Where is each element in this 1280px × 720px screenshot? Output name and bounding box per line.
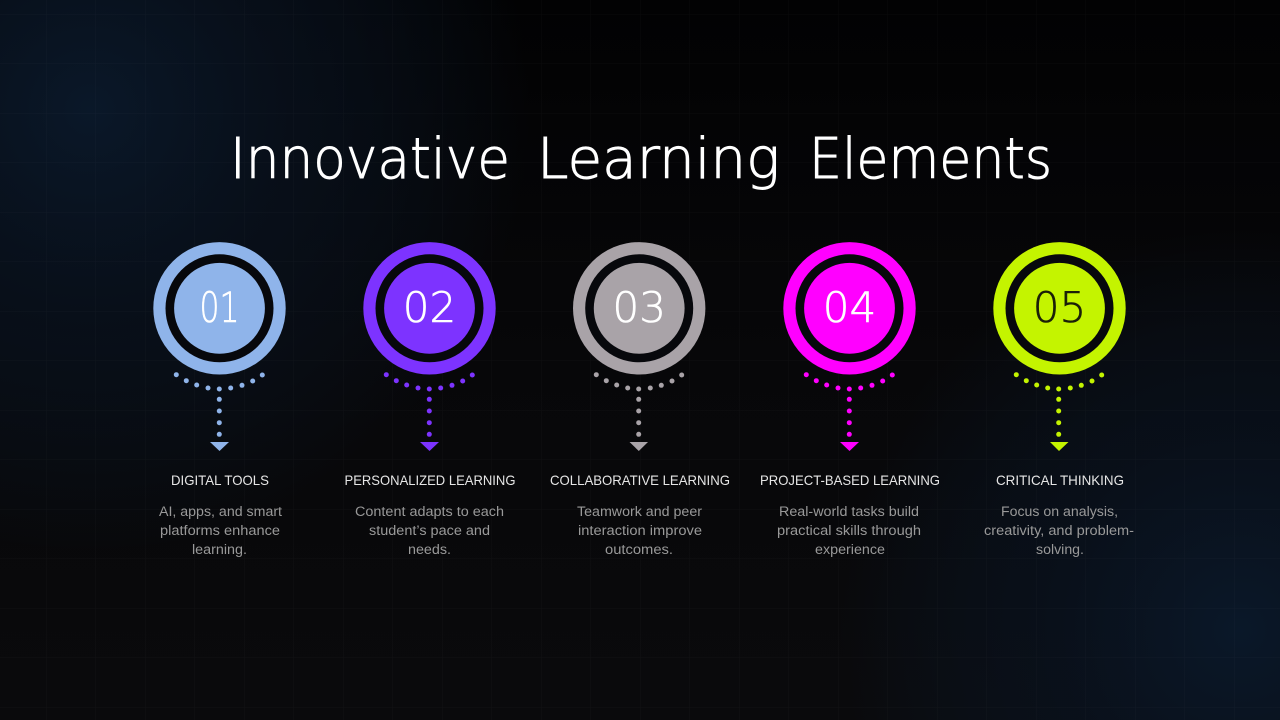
- description 02: student’s pace and: [369, 523, 490, 538]
- step 04: project-based learning: [760, 242, 940, 557]
- description 02: Content adapts to each: [355, 504, 504, 519]
- description 05: creativity, and problem-: [984, 523, 1134, 538]
- dotted connector with arrow 02: [384, 372, 475, 451]
- description 03: interaction improve: [578, 523, 702, 538]
- dotted connector with arrow 03: [594, 372, 684, 451]
- dotted connector with arrow 05: [1014, 372, 1104, 451]
- badge 01: 01: [200, 283, 240, 332]
- heading 02: PERSONALIZED LEARNING: [344, 472, 516, 488]
- dotted connector with arrow 01: [174, 372, 265, 451]
- badge 02: [363, 242, 496, 374]
- dotted connector with arrow 04: [804, 372, 895, 451]
- description 04: [777, 504, 921, 557]
- description 05: [984, 504, 1134, 557]
- badge 05: [993, 242, 1126, 374]
- description 04: experience: [815, 542, 885, 557]
- heading 03: COLLABORATIVE LEARNING: [550, 472, 730, 488]
- badge 01: [153, 242, 286, 374]
- description 01: AI, apps, and smart: [159, 504, 282, 519]
- badge 04: 04: [823, 283, 876, 332]
- step 03: collaborative learning: [550, 242, 730, 557]
- title: Elements: [809, 127, 1052, 192]
- description 04: practical skills through: [777, 523, 921, 538]
- step 01: digital tools: [153, 242, 286, 557]
- description 01: learning.: [192, 542, 247, 557]
- badge 02: 02: [403, 283, 456, 332]
- badge 04: [783, 242, 916, 374]
- description 01: platforms enhance: [160, 523, 280, 538]
- badge 05: 05: [1033, 283, 1086, 332]
- heading 04: PROJECT-BASED LEARNING: [760, 472, 940, 488]
- description 04: Real-world tasks build: [779, 504, 919, 519]
- title: Learning: [537, 127, 780, 192]
- step 05: critical thinking: [984, 242, 1134, 557]
- badge 03: [573, 242, 705, 374]
- description 03: Teamwork and peer: [577, 504, 703, 519]
- step 02: personalized learning: [344, 242, 516, 557]
- description 02: needs.: [408, 542, 451, 557]
- heading 01: DIGITAL TOOLS: [171, 472, 269, 488]
- description 05: solving.: [1036, 542, 1084, 557]
- description 02: [355, 504, 504, 557]
- description 01: [159, 504, 282, 557]
- description 05: Focus on analysis,: [1001, 504, 1118, 519]
- title: Innovative: [230, 127, 510, 192]
- description 03: [577, 504, 703, 557]
- badge 03: 03: [612, 283, 666, 332]
- title: [230, 127, 1052, 192]
- heading 05: CRITICAL THINKING: [996, 472, 1124, 488]
- description 03: outcomes.: [605, 542, 673, 557]
